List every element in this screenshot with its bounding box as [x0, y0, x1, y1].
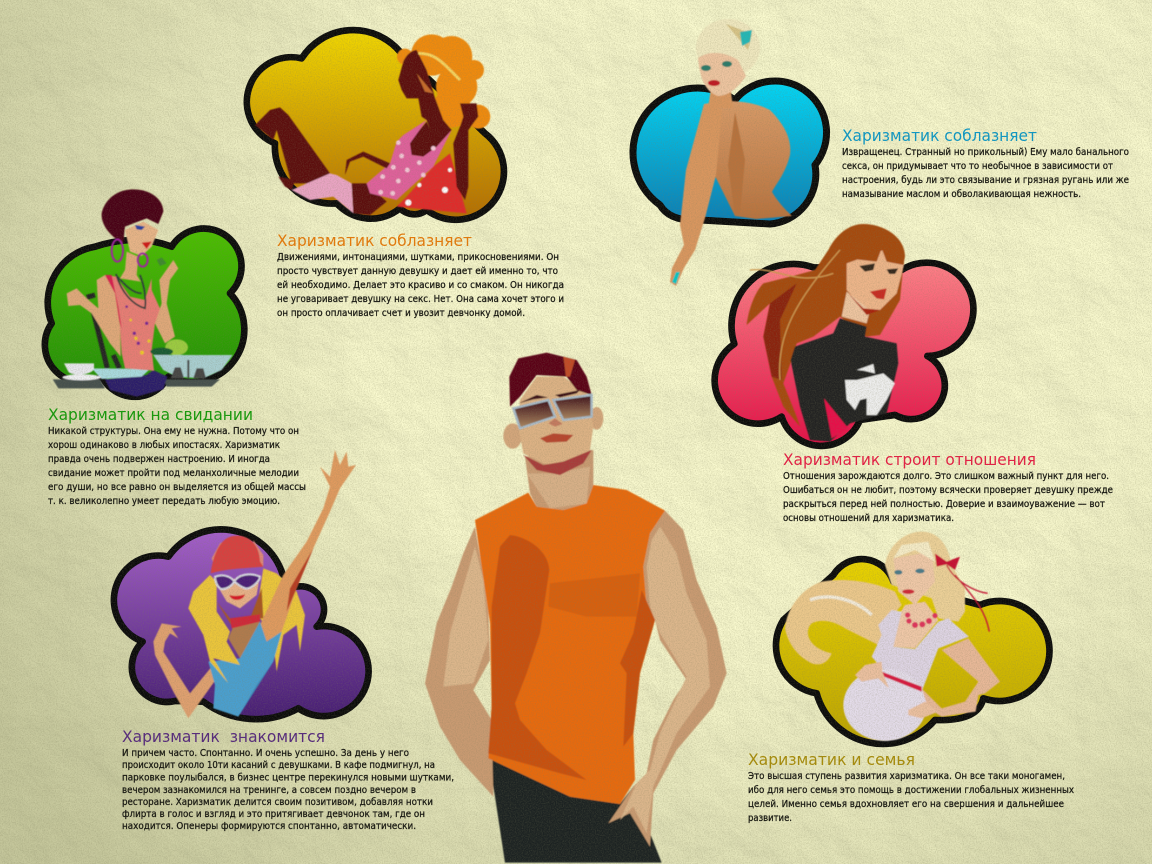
body text: секса, он придумывает что то необычное в зависимости от: [842, 161, 1113, 172]
body text: [277, 252, 564, 319]
panel: family: [748, 532, 1074, 824]
left arm: [425, 527, 493, 797]
body text: свидание может пройти под меланхоличные мелодии: [48, 468, 299, 479]
illustration: reclining woman: [255, 34, 490, 215]
body text: [842, 147, 1129, 200]
panel: blue seduction: [633, 19, 1129, 286]
cloud: pink: [715, 263, 973, 446]
body text: правда очень подвержен настроению. И иногда: [48, 454, 270, 465]
body text: основы отношений для харизматика.: [783, 513, 954, 524]
cloud: yellow family: [776, 559, 1049, 744]
body text: вечером зазнакомился на тренинге, а совсем поздно вечером в: [122, 785, 416, 796]
cloud: green: [45, 229, 244, 397]
panel: relationships: [715, 224, 1113, 524]
body text: развитие.: [748, 813, 792, 824]
illustration: waving woman: [153, 450, 356, 718]
body text: [122, 748, 454, 832]
body text: ресторане. Харизматик делится своим позитивом, добавляя нотки: [122, 797, 433, 808]
body text: происходит около 10ти касаний с девушками. В кафе подмигнул, на: [122, 760, 435, 771]
illustration: long-haired woman: [747, 224, 905, 442]
body text: он просто оплачивает счет и увозит девчонку домой.: [277, 308, 525, 319]
body text: целей. Именно семья вдохновляет его на свершения и дальнейшее: [748, 799, 1064, 810]
cloud: blue: [633, 81, 827, 224]
body text: Это высшая ступень развития харизматика. Он все таки моногамен,: [748, 771, 1065, 782]
body text: парковке поулыбался, в бизнес центре перекинулся новыми шутками,: [122, 772, 454, 784]
illustration: central charismatic man: [425, 353, 727, 863]
body text: Никакой структуры. Она ему не нужна. Потому что он: [48, 426, 299, 437]
pants: [488, 758, 662, 863]
body text: ибо для него семья это помощь в достижении глобальных жизненных: [748, 785, 1074, 796]
body text: Движениями, интонациями, шутками, прикосновениями. Он: [277, 252, 559, 263]
cloud: yellow: [247, 30, 504, 220]
right arm: [608, 511, 727, 847]
illustration: woman at a table: [53, 189, 233, 397]
heading: Харизматик и семья: [748, 750, 915, 769]
body text: раскрыться перед ней полностью. Доверие и взаимоуважение — вот: [783, 499, 1105, 510]
body text: [748, 771, 1074, 824]
neck: [525, 450, 593, 510]
illustration: expectant mother: [785, 532, 1000, 741]
panel: date: [45, 189, 306, 507]
body text: флирта в голос и взгляд и это притягивает девчонок там, где он: [122, 809, 425, 820]
body text: намазывание маслом и обволакивающая нежность.: [842, 189, 1081, 200]
body text: просто чувствует данную девушку и дает ей именно то, что: [277, 266, 558, 277]
body text: Отношения зарождаются долго. Это слишком важный пункт для него.: [783, 471, 1109, 482]
body text: ей необходимо. Делает это красиво и со смаком. Он никогда: [277, 280, 564, 291]
heading: Харизматик строит отношения: [783, 450, 1036, 469]
panel: meets: [114, 450, 454, 832]
body text: его души, но все равно он выделяется из общей массы: [48, 482, 306, 493]
body text: Ошибаться он не любит, поэтому всячески проверяет девушку прежде: [783, 485, 1113, 496]
body text: И причем часто. Спонтанно. И очень успешно. За день у него: [122, 748, 409, 759]
heading: Харизматик соблазняет: [842, 126, 1037, 145]
shirt: [475, 485, 665, 804]
heading: Харизматик соблазняет: [277, 231, 472, 250]
body text: т. к. великолепно умеет передать любую эмоцию.: [48, 496, 280, 507]
body text: не уговаривает девушку на секс. Нет. Она сама хочет этого и: [277, 294, 564, 305]
heading: Харизматик на свидании: [48, 405, 253, 424]
heading: Харизматик знакомится: [122, 727, 325, 746]
body text: хорош одинаково в любых ипостасях. Харизматик: [48, 440, 280, 451]
cloud: purple: [114, 529, 369, 719]
panel: orange seduction: [247, 30, 564, 319]
body text: находится. Опенеры формируются спонтанно, автоматически.: [122, 821, 416, 832]
illustration: woman seen from behind: [670, 19, 792, 286]
body text: [48, 426, 306, 507]
body text: [783, 471, 1113, 524]
head: [503, 353, 603, 475]
